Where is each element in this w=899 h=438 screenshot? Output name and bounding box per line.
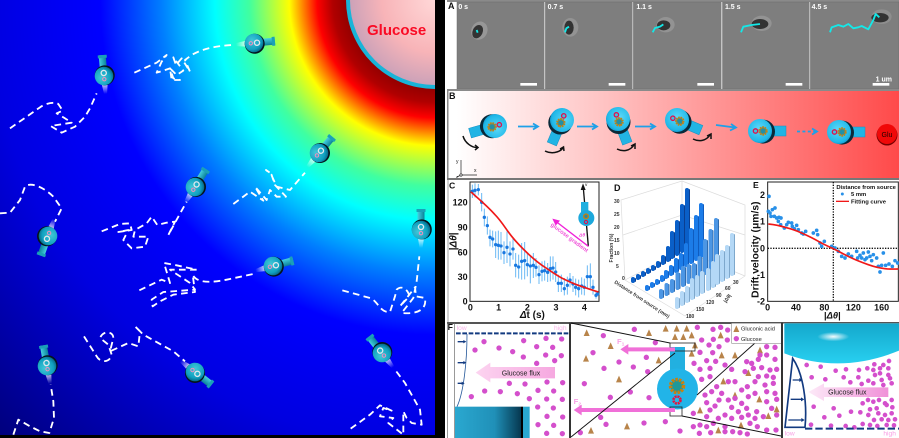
scatter points: [768, 196, 898, 272]
axis labels: 30: [733, 280, 739, 286]
icon: microrobot 6: [412, 209, 432, 248]
robot step 3: [602, 103, 639, 148]
inset: robot and gradient direction: v: [585, 182, 588, 187]
axis labels: |Δθ|: [723, 293, 733, 304]
legend: gluconic acid and glucose: Glucose: [741, 337, 762, 343]
axis labels: 15: [614, 238, 620, 244]
label: B: B: [449, 91, 456, 101]
axis labels: [609, 199, 739, 320]
coordinate axes: x: [474, 168, 477, 174]
bars row 1: [633, 190, 689, 281]
particle frames and cyan tracks: 0.7 s: [548, 4, 563, 11]
x axis ticks: 4: [582, 302, 587, 312]
blue progress arrows: [518, 124, 817, 134]
legend: gluconic acid and glucose: [732, 323, 782, 343]
right zoom panel: high: [883, 431, 896, 438]
axis labels: 180: [686, 314, 695, 320]
glucose source: Glu: Glu: [882, 132, 893, 139]
y axis ticks: 60: [458, 247, 468, 257]
y axis ticks: 30: [458, 272, 468, 282]
particle frames and cyan tracks: 1 um: [876, 76, 892, 83]
y axis title: |Δθ|: [448, 232, 459, 250]
x axis ticks: 160: [874, 303, 889, 313]
plot frame: [768, 182, 898, 301]
panel D: 3D bar chart: [609, 181, 745, 320]
inset: robot and gradient direction: glucose gradient: [549, 222, 589, 254]
label: D: D: [614, 183, 621, 193]
robot step 1: [467, 111, 510, 145]
gluconic acid and glucose, left half: [583, 325, 669, 434]
x axis ticks: 0: [765, 303, 770, 313]
x axis ticks: 0: [468, 302, 473, 312]
force arrows F1 F2: F: [574, 397, 578, 406]
3D axes walls: [621, 181, 745, 316]
icon: microrobot 10: [362, 330, 402, 373]
axis labels: 90: [716, 293, 722, 299]
x axis ticks: 40: [791, 303, 801, 313]
panel B: reorientation sequence: [445, 89, 899, 180]
right zoom panel: [781, 323, 899, 438]
robot step 2: [540, 104, 578, 149]
x axis title: |Δθ|: [824, 310, 841, 320]
axis labels: 25: [614, 212, 620, 218]
legend: gluconic acid and glucose: Gluconic acid: [741, 327, 775, 333]
fitting curve: [471, 192, 598, 292]
funnel lines: [571, 323, 781, 437]
glucose molecules: [807, 361, 895, 427]
black rotation arrows: [463, 134, 711, 153]
label: A: A: [448, 1, 455, 11]
y axis ticks: 90: [458, 222, 468, 232]
inset: robot and gradient direction: [549, 182, 594, 254]
y axis ticks: 0: [760, 243, 765, 253]
bars row 4: [677, 235, 734, 307]
flux arrow: Glucose flux: Glucose flux: [828, 389, 867, 396]
flux arrow: Glucose flux: Glucose flux: [502, 370, 541, 377]
stem cross-section: [455, 407, 530, 438]
right zoom panel: low: [785, 431, 795, 438]
force arrows F1 F2: 1: [622, 342, 625, 348]
panel C: angle vs time chart: [448, 180, 608, 322]
y axis ticks: -1: [757, 270, 765, 280]
legend: 5 mm: [851, 192, 866, 198]
legend: [836, 185, 897, 205]
glucose source: Glu: [876, 124, 898, 146]
x axis ticks: 80: [819, 303, 829, 313]
axis labels: 10: [614, 251, 620, 257]
trajectories: dashed swimming paths: [0, 45, 425, 435]
axis labels: 0: [622, 276, 625, 282]
velocity profile: [457, 334, 467, 407]
x axis title: Δt (s): [519, 310, 545, 321]
force arrows F1 F2: F: [617, 337, 622, 346]
x axis ticks: [468, 302, 587, 312]
x axis ticks: 1: [496, 302, 501, 312]
x axis ticks: 2: [525, 302, 530, 312]
x axis ticks: 3: [553, 302, 558, 312]
icon: microrobot 8: [34, 343, 61, 385]
icon: microrobot 3: [300, 131, 341, 174]
x axis ticks: [765, 303, 889, 313]
legend: Fitting curve: [851, 199, 887, 205]
bars row 3: [661, 220, 718, 297]
robot step 5: [748, 119, 786, 144]
robot step 6: [827, 120, 865, 145]
error bars: [472, 183, 596, 299]
left zoom panel: [447, 322, 571, 438]
axis labels: Fraction (%): [609, 233, 615, 262]
force arrows F1 F2: 2: [578, 402, 581, 408]
particle frames and cyan tracks: 4.5 s: [812, 4, 827, 11]
coordinate axes: y: [456, 159, 459, 165]
data points: [472, 190, 598, 295]
icon: microrobot 4: [178, 164, 215, 208]
velocity profile: [785, 358, 806, 427]
particle frames and cyan tracks: [458, 4, 892, 86]
axis labels: 20: [614, 225, 620, 231]
glucose molecules: [471, 338, 563, 434]
particle frames and cyan tracks: 1.5 s: [725, 4, 741, 11]
coordinate axes: z: [456, 174, 458, 179]
label: C: C: [449, 181, 456, 191]
icon: microrobot 7: [253, 252, 296, 281]
icon: microrobot 1: [235, 32, 276, 55]
centre robot with gears: [657, 343, 698, 416]
centre zoom panel: [571, 323, 781, 437]
force arrows F1 F2: [574, 337, 675, 415]
particle frames and cyan tracks: 0 s: [458, 4, 468, 11]
icon: microrobot 2: [93, 54, 116, 95]
sphere surface: [784, 323, 899, 363]
left zoom panel: low: [457, 325, 467, 332]
axis labels: 5: [616, 264, 619, 270]
fitting curve: [768, 224, 898, 269]
icon: microrobot 9: [174, 354, 217, 393]
bars row 2: [647, 205, 703, 289]
y axis title: Drift velocity (μm/s): [751, 201, 762, 298]
label: Glucose: Glucose: [367, 22, 426, 39]
panel: glucose gradient field: [0, 0, 445, 438]
left zoom panel: high: [554, 325, 567, 332]
axis labels: 30: [614, 199, 620, 205]
legend: Distance from source: [836, 185, 897, 191]
reference lines: [768, 182, 898, 301]
robot step 4: [661, 104, 706, 142]
left zoom panel: F: [448, 322, 453, 332]
y axis ticks: -2: [757, 297, 765, 307]
glucose source: [346, 0, 435, 89]
y axis ticks: 1: [760, 217, 765, 227]
panel E: drift velocity chart: [751, 180, 898, 320]
axis labels: 120: [706, 300, 715, 306]
label: E: E: [753, 180, 759, 190]
y axis ticks: 2: [760, 190, 765, 200]
y axis ticks: 120: [453, 197, 468, 207]
coordinate axes: [456, 159, 477, 179]
panel A: microscopy time series: [445, 0, 899, 91]
y axis ticks: [453, 197, 468, 307]
axis labels: 60: [725, 286, 731, 292]
y axis ticks: 0: [463, 297, 468, 307]
icon: microrobot 5: [31, 215, 63, 259]
plot frame: [470, 182, 599, 301]
axis labels: 150: [696, 307, 705, 313]
inset: robot and gradient direction: Δθ: [578, 233, 585, 239]
x axis ticks: 120: [846, 303, 861, 313]
particle frames and cyan tracks: 1.1 s: [636, 4, 652, 11]
axis labels: Distance from source (mm): [613, 280, 671, 320]
panel F: glucose flux schematic: [445, 322, 899, 438]
y axis ticks: [757, 190, 765, 307]
